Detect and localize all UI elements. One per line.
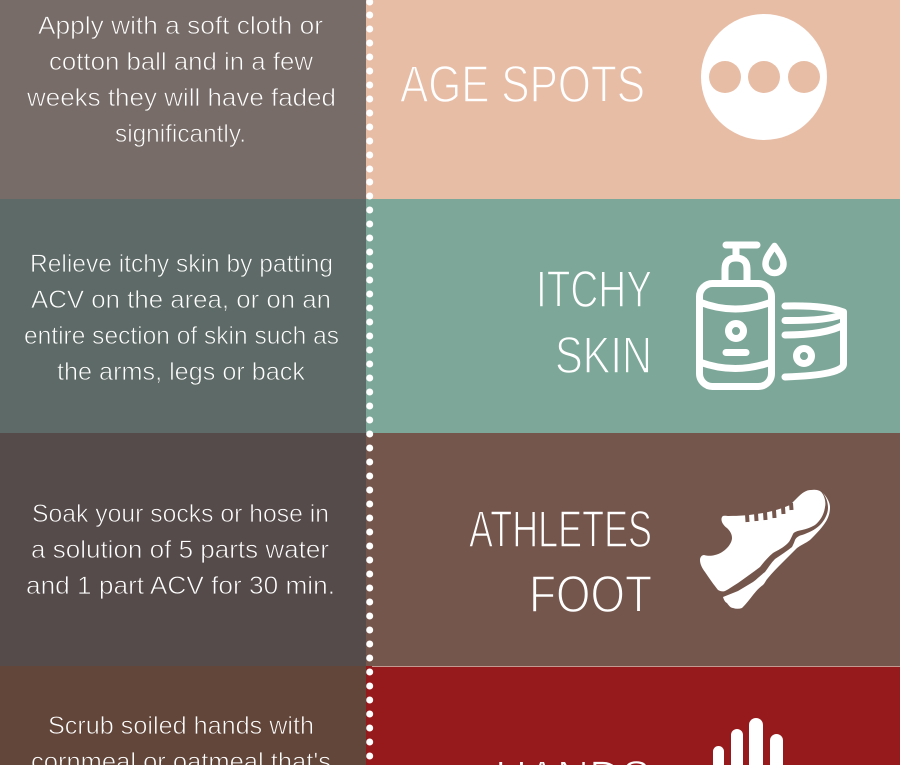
text: athletes foot description xyxy=(26,500,335,600)
heading: itchy skin: ITCHY xyxy=(536,261,652,319)
heading: athletes foot: FOOT xyxy=(529,566,652,624)
text: athletes foot description: and 1 part ACV for 30 min. xyxy=(26,572,335,600)
text: athletes foot description: a solution of 5 parts water xyxy=(31,536,329,564)
panel: itchy skin title xyxy=(366,199,900,433)
dotted divider xyxy=(366,0,373,760)
icon: running shoe xyxy=(700,490,830,609)
text: age spots description: Apply with a soft cloth or xyxy=(38,12,323,40)
panel: hands title xyxy=(366,666,900,765)
heading: athletes foot: ATHLETES xyxy=(469,501,652,559)
panel: age spots title xyxy=(366,0,900,199)
heading: athletes foot xyxy=(469,501,652,624)
heading: itchy skin xyxy=(536,261,652,385)
heading: age spots: AGE SPOTS xyxy=(400,56,645,114)
icon: three dots in circle xyxy=(701,14,827,140)
panel: hands description xyxy=(0,666,366,765)
text: age spots description: significantly. xyxy=(115,120,246,148)
text: itchy skin description: the arms, legs or back xyxy=(57,358,306,386)
text: itchy skin description xyxy=(24,250,339,386)
text: age spots description: cotton ball and in a few xyxy=(49,48,314,76)
text: itchy skin description: entire section of skin such as xyxy=(24,322,339,350)
panel: athletes foot title xyxy=(366,433,900,666)
panel: itchy skin description xyxy=(0,199,366,433)
panel: athletes foot description xyxy=(0,433,366,666)
text: itchy skin description: Relieve itchy skin by patting xyxy=(30,250,333,278)
heading: itchy skin: SKIN xyxy=(555,327,652,385)
text: age spots description: weeks they will have faded xyxy=(26,84,336,112)
icon: lotion bottle and jar xyxy=(700,245,844,386)
text: age spots description xyxy=(26,12,336,148)
panel: age spots description xyxy=(0,0,366,199)
text: athletes foot description: Soak your socks or hose in xyxy=(32,500,329,528)
text: hands description xyxy=(31,712,331,765)
text: hands description: Scrub soiled hands with xyxy=(48,712,314,740)
text: itchy skin description: ACV on the area, or on an xyxy=(31,286,331,314)
icon: hand fingers xyxy=(713,718,783,765)
